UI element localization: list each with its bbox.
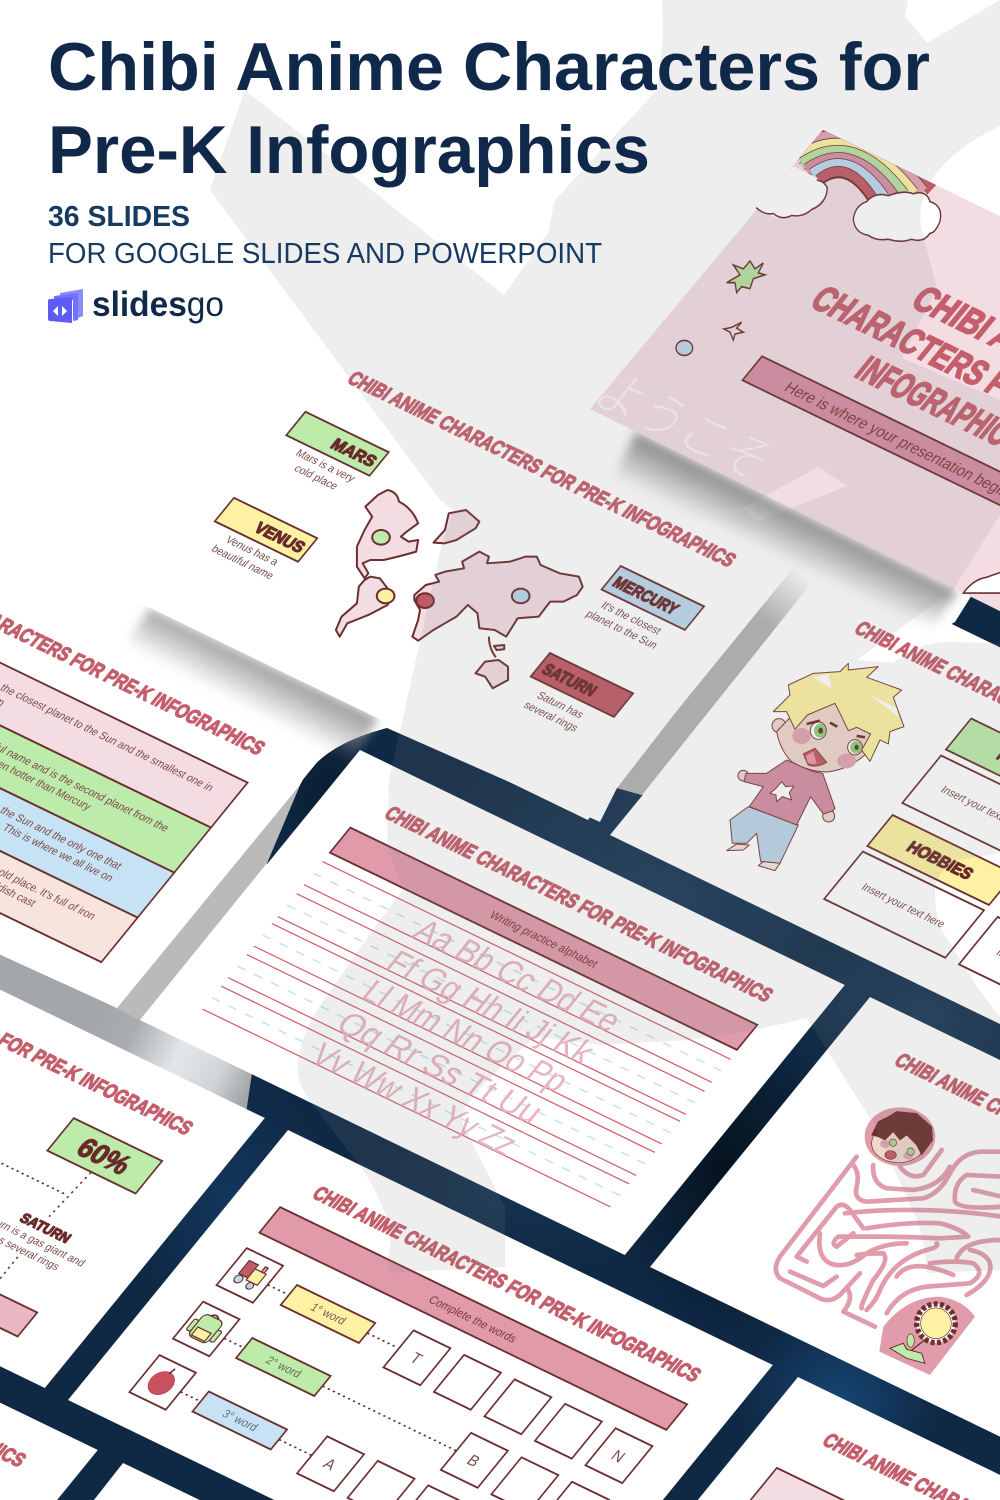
icon: backpack: [173, 1302, 239, 1356]
subtitle: slide count: 36 SLIDES: [48, 201, 190, 233]
label: Mars: cold place: [291, 463, 340, 492]
maze illustration: [776, 1107, 1000, 1375]
table rows: [0, 584, 248, 962]
icon: boy head at maze start: [865, 1107, 935, 1166]
slide: bottom-right cropped: [578, 1377, 1000, 1500]
label: Mercury: [580, 566, 704, 657]
value box 60%: [47, 1118, 162, 1194]
letter boxes: [297, 1330, 652, 1500]
info card: name: [902, 719, 1000, 862]
slide: planet percentages: [0, 883, 265, 1388]
dotted connectors: [0, 1130, 90, 1291]
shadow under map slide: [125, 608, 378, 765]
info card: third column: [959, 917, 1000, 1023]
slide: maze: [650, 997, 1000, 1500]
icon: sunflower at maze end: [879, 1297, 975, 1375]
slide: complete the words: [68, 1130, 773, 1500]
label: Saturn: Saturn has: [534, 690, 586, 721]
alphabet letters: [304, 911, 630, 1163]
letter boxes: T: [406, 1350, 426, 1368]
main title: Pre-K Infographics: [48, 112, 650, 188]
cover text: [580, 194, 1000, 610]
letter boxes: A: [319, 1456, 340, 1474]
translucent grey swirl overlay: [210, 0, 1000, 1273]
label: Mars: MARS: [327, 436, 380, 471]
clouds: [756, 166, 1000, 593]
label: Mars: [266, 412, 389, 501]
label: Venus: beautiful name: [209, 543, 276, 582]
label: Saturn: [509, 653, 633, 744]
label: Saturn: several rings: [521, 699, 581, 735]
info card: hobbies: Insert your text here: [859, 881, 947, 930]
info card: hobbies: HOBBIES: [903, 838, 977, 883]
wordmark: slidesgo: [92, 285, 224, 324]
label: Venus: VENUS: [250, 519, 309, 557]
pink value box: [0, 1270, 37, 1337]
complete the words banner: Complete the words: [426, 1294, 519, 1345]
info card: hobbies: [824, 815, 1000, 958]
label: Mercury: MERCURY: [609, 574, 683, 618]
word labels: [192, 1285, 375, 1450]
slide: bottom-centre cropped: [90, 1463, 210, 1500]
chibi boy character: [727, 663, 904, 871]
icon: train: [217, 1248, 283, 1303]
main title: [48, 29, 930, 188]
label: Mercury: It's the closest: [598, 600, 664, 637]
pink table header: [736, 1468, 979, 1500]
rainbow: [787, 129, 932, 200]
word labels: 1° word: [307, 1302, 348, 1327]
slide title: CHIBI ANIME CHARACTERS FOR PRE-K INFOGRAPHICS: [380, 803, 777, 1007]
alphabet letters: Ff Gg Hh Ii Jj Kk: [379, 943, 603, 1070]
icon: apple: [129, 1355, 196, 1410]
letter boxes: B: [463, 1452, 483, 1471]
word labels: 3° word: [219, 1408, 260, 1434]
slide title: CHIBI ANIME CHARACTERS FOR PRE-K INFOGRAPHICS: [308, 1183, 705, 1387]
label: Mars: Mars is a very: [293, 447, 358, 485]
writing practice banner: [330, 828, 757, 1050]
subtitle: compatibility: FOR GOOGLE SLIDES AND POWERPOINT: [48, 238, 602, 270]
Saturn description: SATURN: [17, 1210, 75, 1246]
world map illustration: [336, 490, 583, 688]
shadow under cover slide: [615, 432, 958, 630]
shadow band below table slide: [0, 950, 252, 1120]
slide: planets table: [0, 503, 337, 1008]
complete the words banner: [259, 1207, 687, 1430]
shadow band between table slide and writing slide: [117, 785, 300, 1020]
decorations: star, plus, dot: [676, 261, 765, 355]
navy backdrop behind the slides: [0, 580, 1000, 1500]
brand logo: [48, 285, 224, 324]
cover text: ようこそ: [580, 353, 794, 493]
alphabet letters: Aa Bb Cc Dd Ee: [406, 912, 630, 1038]
dotted connectors: [181, 1285, 499, 1500]
label: Mercury: planet to the Sun: [583, 608, 660, 652]
alphabet letters: Qq Rr Ss Tt Uu: [329, 1004, 551, 1130]
main title: Chibi Anime Characters for: [48, 29, 930, 105]
shadow band between map slide and character slide: [617, 565, 818, 795]
writing practice banner: Writing practice alphabet: [487, 910, 601, 971]
slide: character profile: [610, 565, 1000, 1070]
slide: writing practice alphabet: [140, 750, 845, 1255]
maze walls: [776, 1150, 1000, 1327]
cover slide: [580, 129, 1000, 616]
slide title: CHIBI ANIME CHARACTERS FOR PRE-K INFOGRAPHICS: [343, 368, 740, 572]
Saturn description: [0, 1196, 100, 1281]
label: Venus: [194, 498, 317, 587]
alphabet letters: Ll Mm Nn Oo Pp: [355, 973, 577, 1099]
value box 60%: 60%: [70, 1132, 138, 1180]
label: Saturn: SATURN: [538, 661, 600, 700]
handwriting guide lines: [202, 862, 731, 1207]
icon: stacked slides: [48, 289, 83, 323]
word labels: 2° word: [263, 1355, 304, 1380]
label: Venus: Venus has a: [223, 534, 282, 569]
slide: world map: [103, 315, 808, 820]
alphabet letters: Vv Ww Xx Yy Zz: [304, 1036, 526, 1162]
letter boxes: N: [607, 1448, 628, 1466]
